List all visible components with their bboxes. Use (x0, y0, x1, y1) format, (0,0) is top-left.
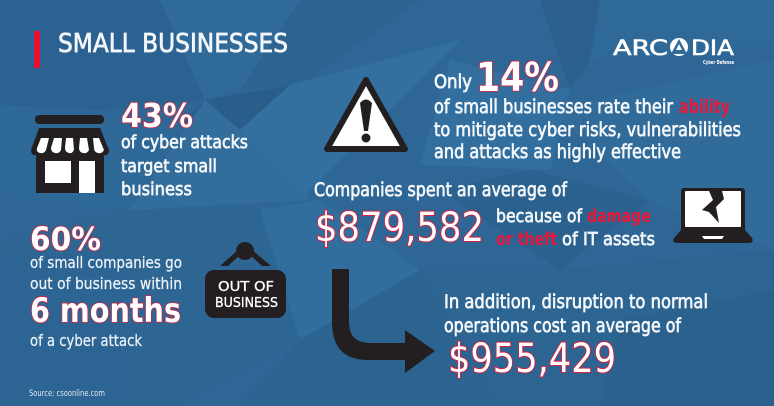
stat: only 14%: to mitigate cyber risks, vulnerabilities (434, 120, 741, 141)
stat: 43% of cyber attacks: of cyber attacks (121, 132, 248, 153)
icon: broken laptop (673, 188, 753, 243)
stat: 43% of cyber attacks (121, 96, 248, 200)
title accent bar (34, 31, 40, 68)
stat: $955,429 disruption: operations cost an average of (444, 316, 681, 337)
stat: $879,582 damage or theft: because of (496, 206, 583, 227)
stat: $955,429 disruption: In addition, disruption to normal (444, 292, 708, 313)
logo: Arcadia Cyber Defense: Cyber Defense (703, 60, 734, 66)
stat: $879,582 damage or theft: of IT assets (562, 229, 655, 250)
arrow (332, 269, 435, 373)
stat: 60% within 6 months: 6 months (30, 291, 181, 331)
logo: Arcadia Cyber Defense: DIA (691, 36, 735, 60)
stat: 43% of cyber attacks: business (121, 179, 192, 200)
stat: only 14%: and attacks as highly effective (434, 142, 681, 163)
stat: 60% within 6 months: of small companies go (30, 253, 182, 272)
stat: $879,582 damage or theft (314, 180, 655, 251)
stat: 60% within 6 months: of a cyber attack (30, 331, 143, 350)
stat: only 14%: of small businesses rate their (434, 97, 673, 118)
stat: 43% of cyber attacks: target small (121, 156, 217, 177)
stat: 60% within 6 months (30, 220, 182, 350)
logo: Arcadia Cyber Defense: ARC (613, 36, 668, 60)
icon: out of business sign (205, 242, 286, 318)
stat: only 14% (434, 55, 741, 163)
stat: $955,429 disruption: $955,429 (448, 336, 616, 382)
stat: only 14%: 14% (476, 55, 559, 101)
stat: 60% within 6 months: 60% (30, 220, 101, 258)
stat: 60% within 6 months: out of business within (30, 274, 182, 293)
icon: storefront (31, 115, 109, 193)
stat: $955,429 disruption (444, 292, 708, 382)
stat: $879,582 damage or theft: $879,582 (315, 205, 484, 251)
stat: 43% of cyber attacks: 43% (121, 96, 193, 135)
stat: $879,582 damage or theft: damage (587, 206, 651, 227)
icon: warning triangle (327, 80, 405, 149)
icon: out of business sign: BUSINESS (215, 295, 278, 311)
logo: Arcadia Cyber Defense (613, 36, 735, 66)
stat: only 14%: ability (679, 97, 730, 118)
stat: only 14%: Only (434, 72, 472, 93)
title: SMALL BUSINESSES (58, 29, 288, 59)
source: Source: csoonline.com (29, 389, 105, 399)
stat: $879,582 damage or theft: or theft (496, 229, 557, 250)
stat: $879,582 damage or theft: Companies spent an average of (314, 180, 567, 201)
icon: out of business sign: OUT OF (218, 279, 274, 295)
